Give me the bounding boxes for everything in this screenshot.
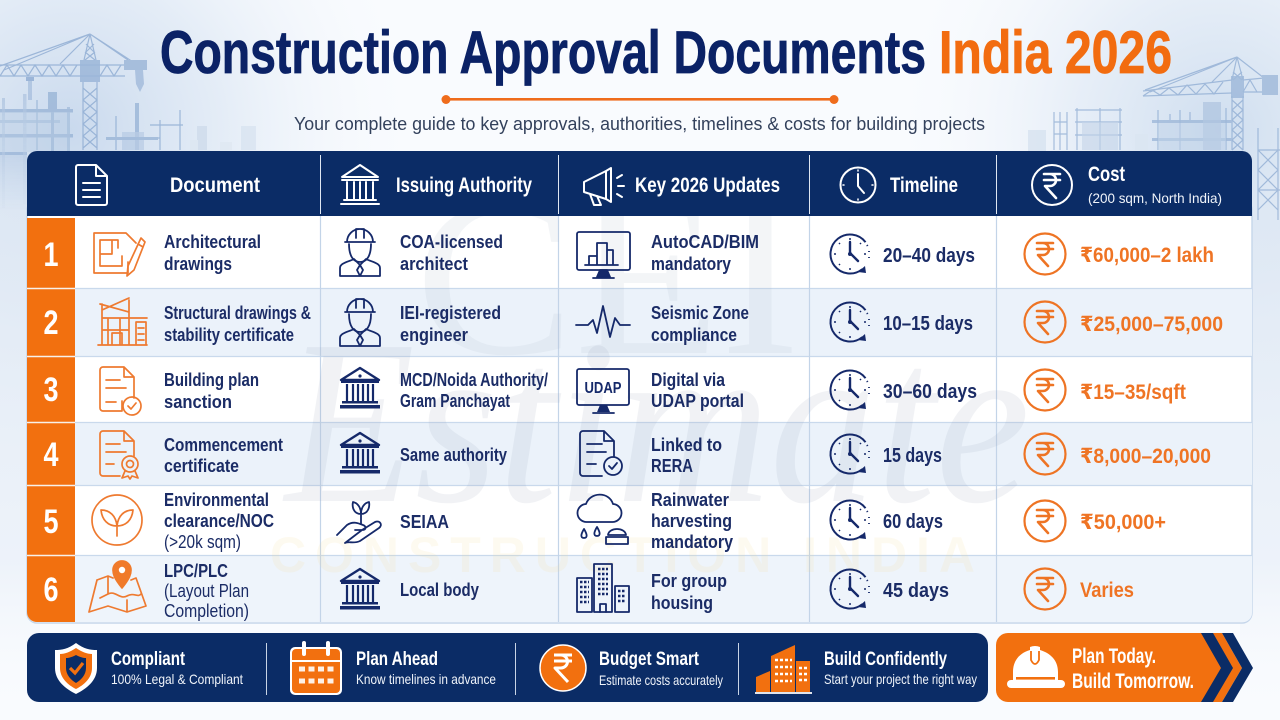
authority: SEIAA [400,512,449,532]
icon: institution [340,433,380,474]
document name [164,370,259,412]
call to action banner: Build Tomorrow. [1072,670,1194,693]
update: Rainwater [651,490,729,510]
authority: IEI-registered [400,303,501,323]
timeline: 20–40 days [883,245,975,267]
benefit: build confidently [755,645,977,693]
background illustration: left crane and buildings [0,34,256,210]
update [651,490,733,552]
row 2 [98,295,1223,349]
update: harvesting [651,511,732,531]
header: Cost: Cost [1088,163,1125,186]
benefit: plan ahead: Plan Ahead [356,649,438,670]
update [651,303,749,345]
update: housing [651,593,713,613]
benefit: compliant: 100% Legal & Compliant [111,671,243,687]
document name: drawings [164,254,232,274]
cost: ₹50,000+ [1080,511,1166,534]
watermark: GHI Estimate Construction India: CEI [415,152,800,402]
document name [164,232,261,274]
header: Issuing Authority [341,165,532,204]
row 1 [94,227,1214,281]
icon: engineer [340,299,380,346]
title underline with dots [442,95,838,104]
row 5 [92,490,1166,552]
cost: ₹25,000–75,000 [1080,313,1223,336]
document name: certificate [164,456,239,476]
document name: Environmental [164,490,269,510]
authority: MCD/Noida Authority/ [400,370,548,390]
update: AutoCAD/BIM [651,232,759,252]
icon: engineer [340,229,380,276]
row 6 [89,561,1134,621]
update: mandatory [651,254,731,274]
update [651,370,744,411]
title: India 2026 [939,19,1172,86]
icon: document with check [580,431,622,476]
update: Linked to [651,435,722,455]
benefit: build confidently: Build Confidently [824,649,947,670]
authority: Gram Panchayat [400,391,510,411]
number column: 6 [44,571,58,609]
update [651,435,722,476]
header: Cost [1032,163,1222,206]
icon: clock [823,363,877,417]
document name: Structural drawings & [164,303,311,323]
number column: 5 [44,503,58,541]
authority: Local body [400,580,479,600]
document name: Completion) [164,601,249,621]
icon: rupee coin [540,645,586,691]
watermark: GHI Estimate Construction India: Estimate [282,292,1030,552]
icon: monitor with buildings [577,232,630,278]
icon: structure under construction [98,298,147,345]
cost: ₹15–35/sqft [1080,381,1186,404]
document name: Commencement [164,435,283,455]
icon: document [76,165,107,205]
title: Construction Approval Documents [160,19,926,86]
benefit: budget smart: Budget Smart [599,649,700,670]
icon: rain cloud harvesting [577,495,628,544]
document name: (>20k sqm) [164,532,241,552]
icon: rupee [1024,568,1066,610]
update: compliance [651,325,737,345]
benefit: plan ahead: Know timelines in advance [356,671,496,687]
benefit: compliant: Compliant [111,649,186,670]
number column: 3 [44,371,58,409]
icon: megaphone [584,168,624,205]
header: Key 2026 Updates [584,168,780,205]
icon: rupee [1024,302,1066,342]
timeline: 45 days [883,580,949,602]
icon: clock [823,493,877,547]
document name: stability certificate [164,325,294,345]
update: For group [651,571,727,591]
authority: engineer [400,325,468,345]
call to action banner: Plan Today. [1072,645,1156,668]
icon: rupee [1024,370,1066,410]
benefit: plan ahead [290,643,496,695]
header: Timeline: Timeline [890,174,958,197]
update: Seismic Zone [651,303,749,323]
document name [164,303,311,345]
icon: clock [823,427,877,481]
icon: seismic wave [576,306,630,337]
icon: clock [823,562,877,616]
header: Cost: (200 sqm, North India) [1088,190,1222,206]
icon: rupee [1024,434,1066,474]
icon: clock [823,227,877,281]
timeline: 10–15 days [883,313,973,335]
update: RERA [651,456,693,476]
icon: architectural drawing [94,233,145,276]
number column: 4 [44,436,59,474]
icon: UDAP monitor: UDAP [584,380,622,397]
document name [164,561,249,621]
document name: (Layout Plan [164,581,249,601]
watermark: GHI Estimate Construction India [270,152,1030,583]
authority: Same authority [400,445,507,465]
footer benefits bar [27,633,988,702]
icon: map with pin [89,561,146,612]
table body panel [27,200,1252,623]
watermark: GHI Estimate Construction India: CONSTRUCTION INDIA [270,527,975,583]
benefit: compliant [55,643,243,694]
authority [400,303,501,345]
authority: architect [400,254,468,274]
call to action banner [996,633,1253,702]
cost: ₹8,000–20,000 [1080,445,1211,468]
document name [164,490,274,552]
icon: UDAP monitor [577,369,629,413]
icon: clock [840,168,876,202]
header: Timeline [840,168,958,202]
cost: ₹60,000–2 lakh [1080,244,1214,267]
icon: leaf in circle [92,495,142,545]
authority: COA-licensed [400,232,503,252]
update: Digital via [651,370,726,390]
icon: institution [340,569,380,610]
benefit: build confidently: Start your project the right way [824,671,977,687]
icon: orange buildings [755,645,812,693]
header: Document: Document [170,174,260,197]
cost: Varies [1080,579,1134,602]
icon: institution [340,368,380,408]
icon: document with check [100,367,141,415]
timeline: 60 days [883,511,943,533]
update: mandatory [651,532,733,552]
icon: institution [341,165,379,204]
authority [400,370,548,411]
icon: rupee [1032,165,1072,205]
timeline: 15 days [883,445,942,467]
table header [27,151,1252,216]
update [651,232,759,274]
icon: calendar [290,643,342,695]
icon: hard hat [1007,646,1065,688]
document name: LPC/PLC [164,561,228,581]
subtitle: Your complete guide to key approvals, authorities, timelines & costs for building projects [294,114,985,134]
icon: hand with plant [337,502,381,543]
document name: Architectural [164,232,261,252]
icon: clock [823,295,877,349]
document name: clearance/NOC [164,511,274,531]
icon: apartment buildings [577,564,629,612]
authority [400,232,503,274]
header: Key 2026 Updates: Key 2026 Updates [635,174,780,197]
icon: shield [55,643,97,694]
header: Document [76,165,260,205]
timeline: 30–60 days [883,381,977,403]
header: Issuing Authority: Issuing Authority [396,174,532,197]
update [651,571,727,613]
row 3 [100,363,1186,417]
benefit: budget smart: Estimate costs accurately [599,672,723,688]
icon: certificate with seal [100,431,138,479]
icon: rupee [1024,500,1066,542]
row 4 [100,427,1211,481]
document name [164,435,283,476]
document name: sanction [164,392,232,412]
update: UDAP portal [651,391,744,411]
number column: 2 [44,304,58,342]
number column [27,218,75,622]
icon: rupee [1024,234,1066,274]
background illustration: right crane and buildings [1028,57,1280,220]
number column: 1 [44,236,58,274]
document name: Building plan [164,370,259,390]
benefit: budget smart [540,645,723,691]
